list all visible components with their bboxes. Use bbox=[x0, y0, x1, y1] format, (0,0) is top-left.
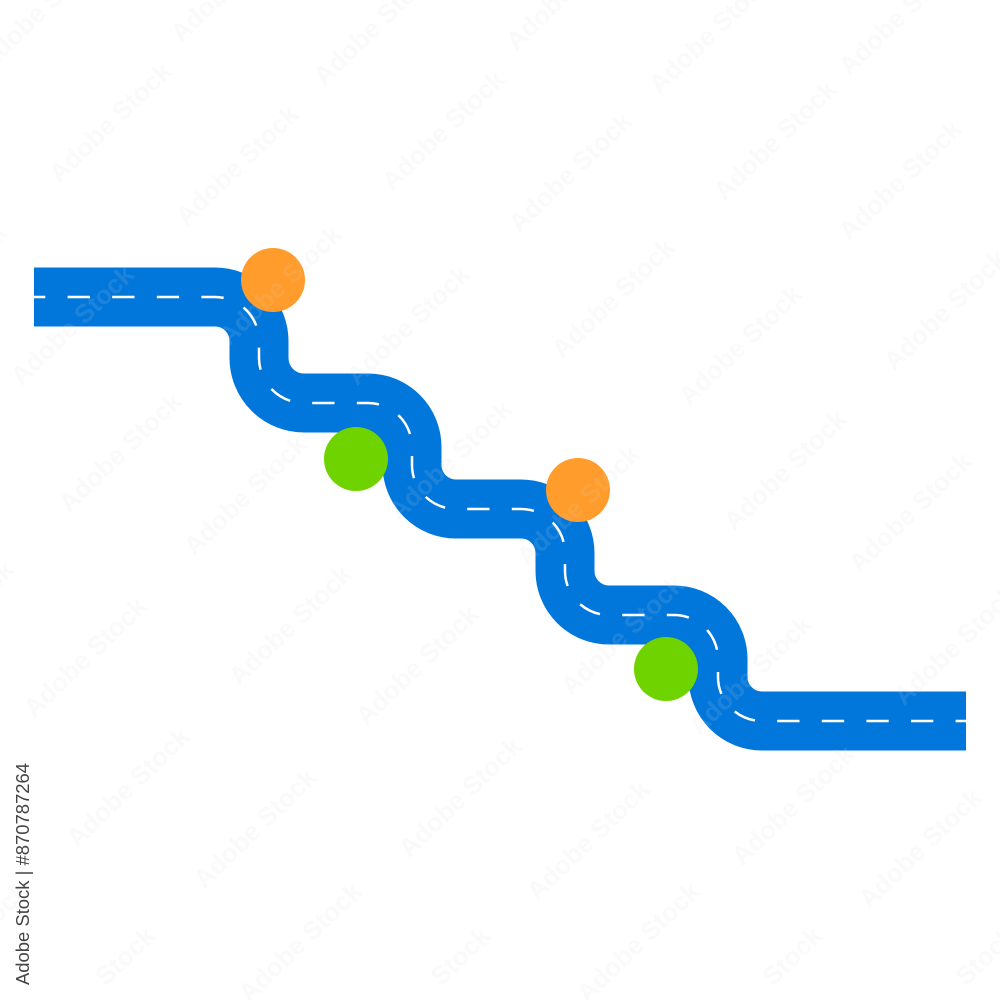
watermark pattern: Adobe Stock bbox=[60, 721, 196, 853]
watermark pattern: Adobe Stock bbox=[852, 782, 988, 914]
marker: orange circle 1 bbox=[241, 248, 305, 312]
watermark pattern: Adobe Stock bbox=[349, 599, 485, 731]
watermark pattern: Adobe Stock bbox=[717, 404, 853, 536]
watermark pattern: Stock bbox=[424, 920, 496, 991]
watermark pattern: Adobe Stock bbox=[510, 439, 646, 571]
watermark pattern: Adobe Stock bbox=[545, 232, 681, 364]
watermark pattern: Adobe Stock bbox=[707, 74, 843, 206]
stock id label: Adobe Stock | #870787264 bbox=[13, 763, 33, 985]
watermark pattern: Adobe Stock bbox=[17, 591, 153, 723]
watermark pattern: Adobe Stock bbox=[725, 739, 861, 871]
watermark pattern: Adobe Stock bbox=[682, 609, 818, 741]
watermark pattern: Adobe Stock bbox=[842, 446, 978, 578]
watermark pattern: Adobe Stock bbox=[554, 569, 690, 701]
watermark pattern: Adobe Stock bbox=[375, 64, 511, 196]
watermark pattern: Adobe Stock bbox=[382, 394, 518, 526]
watermark pattern: Adobe Stock bbox=[169, 99, 305, 231]
watermark pattern: Stock bbox=[89, 920, 161, 991]
watermark pattern: Adobe Stock bbox=[392, 731, 528, 863]
marker: green circle 2 bbox=[634, 637, 698, 701]
watermark pattern: Adobe Stock bbox=[212, 219, 348, 351]
watermark pattern: Stock bbox=[756, 920, 828, 991]
marker: orange circle 2 bbox=[546, 458, 610, 522]
watermark pattern: Adobe Stock bbox=[340, 259, 476, 391]
watermark pattern: Adobe Stock bbox=[187, 762, 323, 894]
watermark pattern: Adobe Stock bbox=[177, 429, 313, 561]
marker: green circle 1 bbox=[324, 427, 388, 491]
watermark pattern: Adobe Stock bbox=[222, 559, 358, 691]
road: winding blue road bbox=[34, 297, 966, 721]
watermark pattern: Adobe Stock bbox=[672, 279, 808, 411]
watermark pattern: Adobe Stock bbox=[42, 56, 178, 188]
watermark pattern: Adobe Stock bbox=[520, 774, 656, 906]
watermark pattern: Adobe Stock bbox=[502, 106, 638, 238]
watermark pattern: Adobe Stock bbox=[4, 259, 140, 391]
watermark pattern: Adobe Stock bbox=[52, 386, 188, 518]
watermark pattern: Adobe Stock bbox=[832, 114, 968, 246]
